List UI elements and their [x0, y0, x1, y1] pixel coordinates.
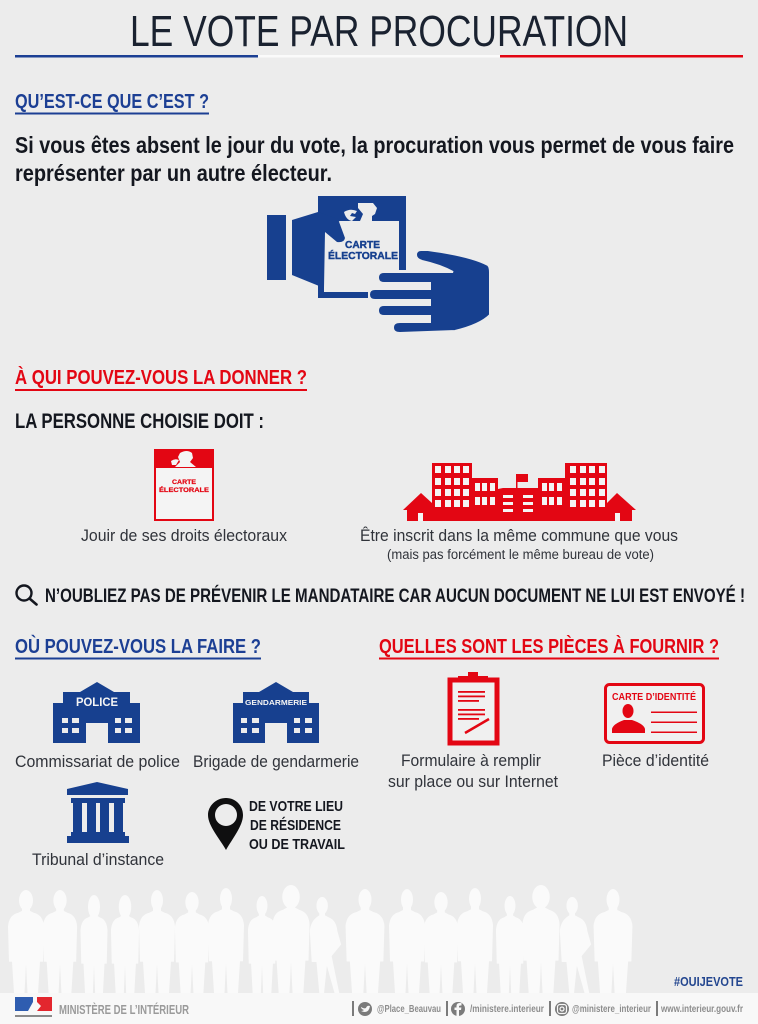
silhouettes of citizens — [8, 885, 632, 993]
logo: république française — [15, 997, 52, 1017]
text block: lieu de résidence: OU DE TRAVAIL — [249, 836, 345, 853]
icon: red town — [403, 463, 636, 521]
label: même commune — [360, 526, 678, 562]
icon: gendarmerie — [233, 682, 319, 743]
icon: red electoral card: CARTE — [172, 479, 197, 486]
label: pièce d'identité: Pièce d’identité — [602, 751, 709, 770]
text block: lieu de résidence: DE RÉSIDENCE — [250, 817, 341, 834]
icon: clipboard form — [450, 672, 497, 743]
icon: police station: POLICE — [76, 697, 118, 709]
subheading: la personne choisie doit: LA PERSONNE CHOISIE DOIT : — [15, 410, 264, 433]
icon: magnifier — [16, 586, 36, 604]
label: même commune: Être inscrit dans la même commune que vous — [360, 526, 678, 545]
icon: identity card — [606, 684, 704, 742]
icon: police station — [53, 682, 140, 743]
label: formulaire: Formulaire à remplir — [401, 751, 541, 770]
footer band — [0, 993, 758, 1024]
icon: gendarmerie: GENDARMERIE — [245, 698, 307, 707]
text block: definition — [15, 132, 734, 186]
icon: courthouse — [67, 782, 129, 843]
label: jouir de ses droits: Jouir de ses droits électoraux — [81, 526, 287, 545]
label: formulaire — [388, 751, 558, 791]
text block: definition: représenter par un autre électeur. — [15, 160, 332, 186]
title: LE VOTE PAR PROCURATION — [130, 7, 628, 56]
icon: location pin — [208, 798, 243, 850]
heading: qu'est-ce que c'est: QU’EST-CE QUE C’EST ? — [15, 91, 209, 113]
social links: @ministere_interieur — [572, 1004, 651, 1015]
icon: hands exchanging electoral card: CARTE — [345, 239, 380, 251]
heading: à qui pouvez-vous la donner: À QUI POUVEZ-VOUS LA DONNER ? — [15, 366, 307, 389]
icon: hands exchanging electoral card: ÉLECTORALE — [328, 249, 398, 262]
icon: identity card: CARTE D’IDENTITÉ — [612, 690, 696, 703]
hashtag: #OUIJEVOTE — [674, 975, 743, 989]
icon: hands exchanging electoral card — [267, 196, 490, 333]
heading: où pouvez-vous la faire: OÙ POUVEZ-VOUS LA FAIRE ? — [15, 634, 261, 658]
ministry name: MINISTÈRE DE L’INTÉRIEUR — [59, 1002, 189, 1017]
label: tribunal: Tribunal d’instance — [32, 850, 164, 869]
text block: lieu de résidence — [249, 798, 345, 853]
icon: red electoral card — [155, 450, 213, 520]
label: brigade: Brigade de gendarmerie — [193, 752, 359, 771]
icon: red electoral card: ÉLECTORALE — [159, 485, 210, 494]
social links: @Place_Beauvau — [377, 1004, 441, 1015]
label: commissariat: Commissariat de police — [15, 752, 180, 771]
social links: /ministere.interieur — [470, 1004, 544, 1015]
label: même commune: (mais pas forcément le même bureau de vote) — [387, 547, 654, 562]
label: formulaire: sur place ou sur Internet — [388, 772, 558, 791]
social links — [352, 1001, 743, 1016]
text block: lieu de résidence: DE VOTRE LIEU — [249, 798, 343, 815]
